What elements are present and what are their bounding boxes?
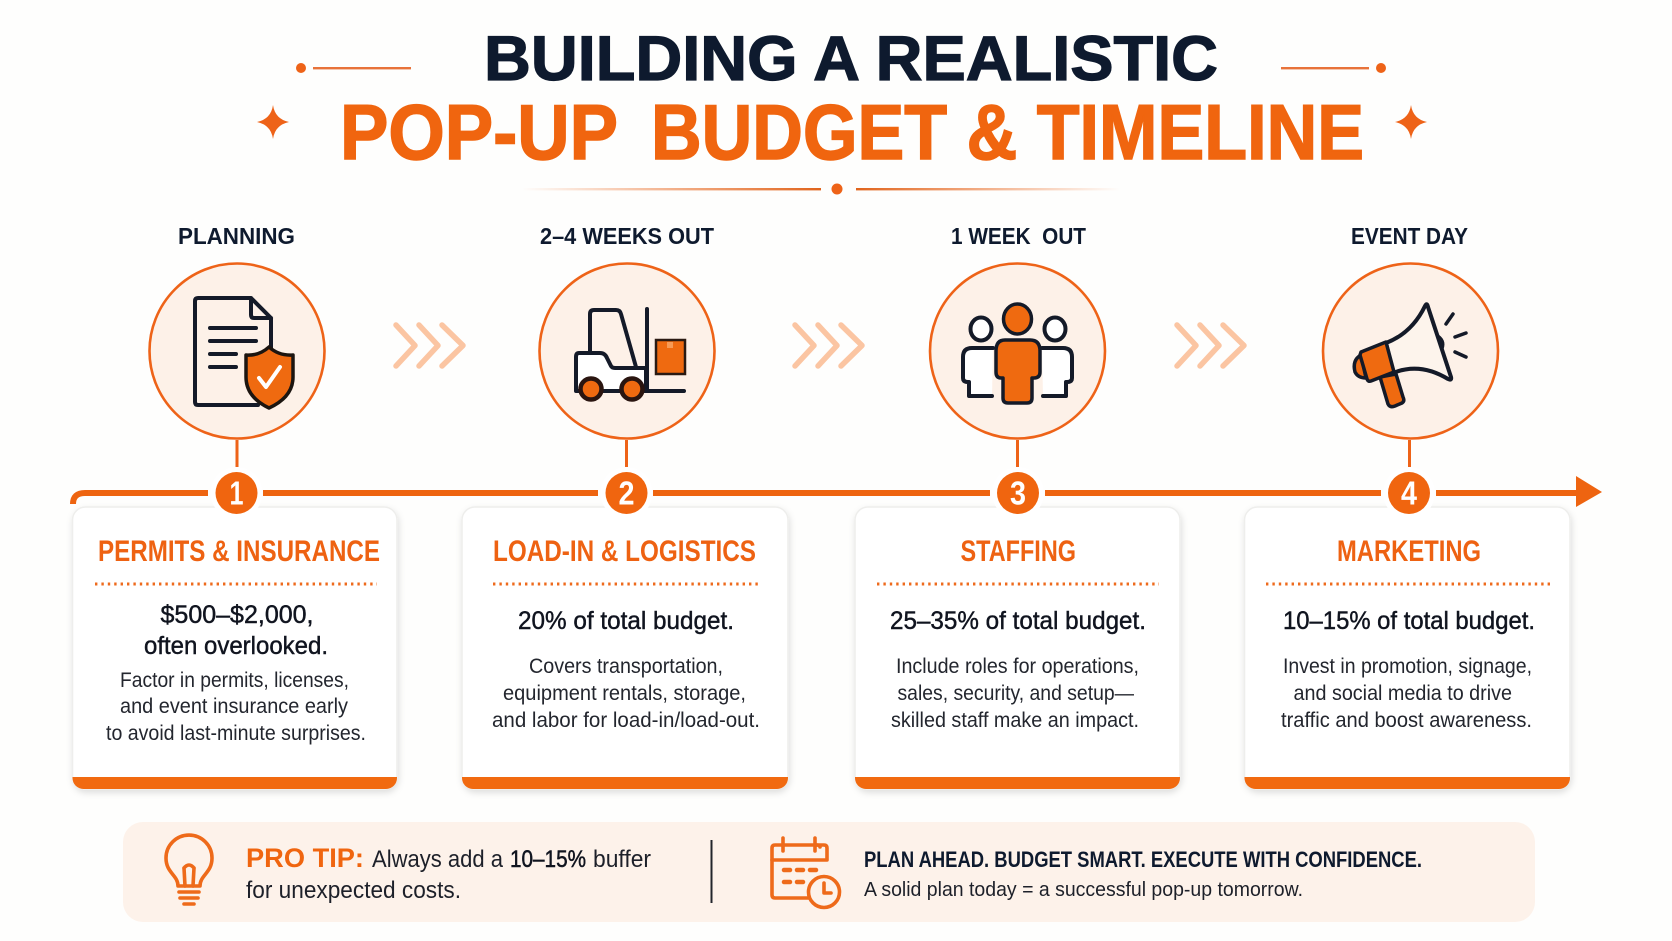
pro tip text xyxy=(246,843,651,904)
card heading: PERMITS & INSURANCE xyxy=(98,535,380,568)
step 2: 2-4 weeks out xyxy=(540,223,714,467)
pro tip text: PRO TIP: xyxy=(246,843,364,873)
description: sales, security, and setup— xyxy=(898,681,1134,705)
budget figure xyxy=(144,601,328,660)
description: Include roles for operations, xyxy=(896,654,1139,678)
timeline arrow xyxy=(73,476,1602,507)
card 4: marketing xyxy=(1244,507,1570,789)
card heading: STAFFING xyxy=(960,535,1076,568)
pro tip text: 10–15% xyxy=(510,846,586,873)
step label: EVENT DAY xyxy=(1351,223,1468,249)
chevrons 2 xyxy=(795,325,862,366)
budget figure: $500–$2,000, xyxy=(160,601,314,629)
description: and event insurance early xyxy=(120,694,348,718)
description xyxy=(891,654,1139,732)
description xyxy=(1281,654,1532,732)
title line 2: POP-UP xyxy=(340,88,618,176)
number badge 2: 2 xyxy=(618,474,634,512)
card heading: LOAD-IN & LOGISTICS xyxy=(493,535,756,568)
connector xyxy=(236,440,238,467)
step label: 1 WEEK OUT xyxy=(951,223,1086,249)
icon: calendar with clock xyxy=(772,838,840,908)
number badge 1: 1 xyxy=(230,474,244,512)
step 1: planning xyxy=(150,223,324,467)
card 2: load-in and logistics xyxy=(462,507,788,789)
description: Invest in promotion, signage, xyxy=(1283,654,1532,678)
description: and social media to drive xyxy=(1294,681,1512,705)
number badge 3: 3 xyxy=(1010,474,1026,512)
connector xyxy=(1016,440,1019,467)
step 4: event day xyxy=(1323,223,1498,467)
description: to avoid last-minute surprises. xyxy=(106,721,366,745)
number badge 4 xyxy=(1383,467,1435,519)
budget figure: 10–15% of total budget. xyxy=(1283,607,1535,635)
description: equipment rentals, storage, xyxy=(503,681,746,705)
pro tip text: buffer xyxy=(593,846,651,873)
card 1: permits and insurance xyxy=(72,507,397,789)
icon: light bulb xyxy=(166,835,212,904)
budget figure: 20% of total budget. xyxy=(518,607,734,635)
description: and labor for load-in/load-out. xyxy=(492,708,760,732)
icon circle xyxy=(1323,264,1498,438)
title xyxy=(340,24,1364,176)
icon: document with shield xyxy=(195,298,293,408)
connector xyxy=(625,440,628,467)
card heading: MARKETING xyxy=(1337,535,1481,568)
connector xyxy=(1408,440,1411,467)
icon circle xyxy=(150,264,324,438)
title line 2 xyxy=(340,88,1364,176)
card 3: staffing xyxy=(855,507,1180,789)
step label: 2–4 WEEKS OUT xyxy=(540,223,714,249)
icon circle xyxy=(930,264,1105,438)
pro tip text: Always add a xyxy=(372,846,504,873)
icon: forklift xyxy=(576,309,685,400)
number badge 2 xyxy=(600,467,652,519)
chevrons 1 xyxy=(396,325,463,366)
description: Covers transportation, xyxy=(529,654,723,678)
description: traffic and boost awareness. xyxy=(1281,708,1532,732)
pro tip text: for unexpected costs. xyxy=(246,877,461,904)
step label: PLANNING xyxy=(178,223,295,249)
title line 2: BUDGET & TIMELINE xyxy=(651,88,1364,176)
chevrons 3 xyxy=(1177,325,1244,366)
number badge 3 xyxy=(992,467,1044,519)
plan ahead text xyxy=(864,847,1422,901)
plan ahead text: A solid plan today = a successful pop-up tomorrow. xyxy=(864,878,1303,901)
bottom banner xyxy=(123,822,1535,922)
description xyxy=(492,654,760,732)
icon: megaphone xyxy=(1354,304,1466,407)
title ornaments xyxy=(257,63,1427,194)
icon: team of people xyxy=(963,304,1072,403)
description: Factor in permits, licenses, xyxy=(120,668,349,692)
plan ahead text: PLAN AHEAD. BUDGET SMART. EXECUTE WITH CONFIDENCE. xyxy=(864,847,1422,872)
budget figure: 25–35% of total budget. xyxy=(890,607,1146,635)
number badge 1 xyxy=(210,467,262,519)
budget figure: often overlooked. xyxy=(144,632,328,660)
description: skilled staff make an impact. xyxy=(891,708,1139,732)
number badge 4: 4 xyxy=(1401,474,1418,512)
step 3: 1 week out xyxy=(930,223,1105,467)
description xyxy=(106,668,366,745)
title line 1: BUILDING A REALISTIC xyxy=(484,24,1218,94)
icon circle xyxy=(540,264,714,438)
